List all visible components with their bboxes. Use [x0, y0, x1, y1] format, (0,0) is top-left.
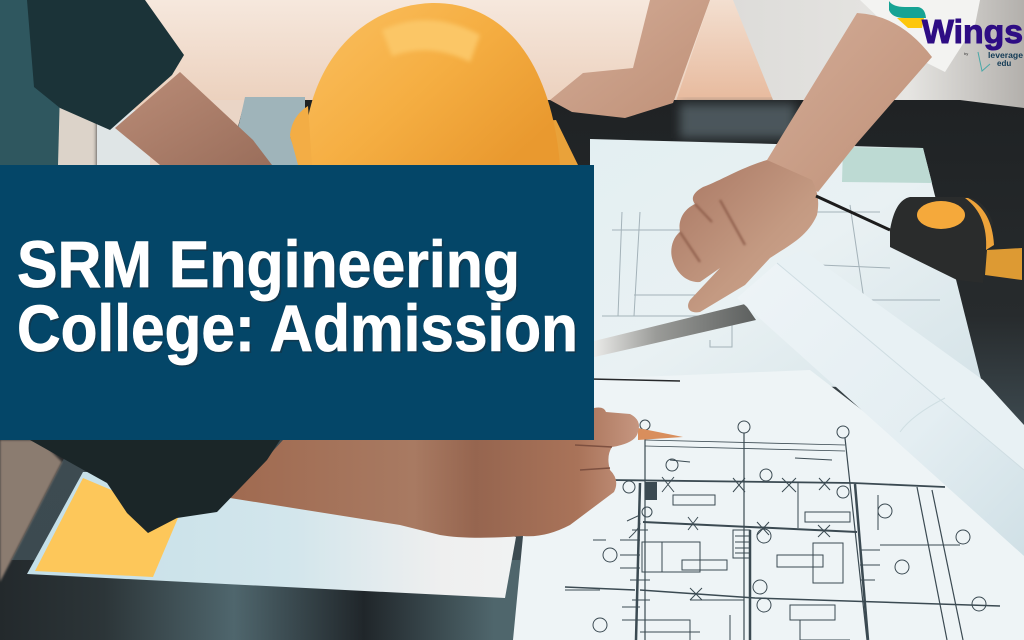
title text	[17, 227, 580, 367]
logo: Wings by leverage edu	[889, 1, 1024, 71]
logo mark	[889, 1, 926, 28]
upper middle person: arm and hand on the table	[550, 0, 710, 118]
title banner	[0, 165, 594, 440]
upper right person: shirt, sleeve and forearm	[733, 0, 1024, 192]
steel ruler	[590, 304, 756, 358]
pencil	[638, 428, 683, 440]
logo: Wings by leverage edu: edu	[997, 59, 1011, 68]
lower-left white sheet with yellow note	[27, 470, 516, 598]
title text: College: Admission	[19, 293, 580, 367]
title text: SRM Engineering	[19, 229, 522, 303]
upper right person: open hand	[671, 160, 818, 312]
title text: College: Admission	[17, 291, 578, 365]
lower person: dark sleeve and arm with hand	[30, 408, 683, 538]
logo: Wings by leverage edu: leverage	[988, 51, 1024, 60]
background: blurred room behind the table	[0, 0, 1024, 170]
upper blueprint sheet	[590, 139, 984, 391]
left person: dark shirt and forearm	[0, 0, 272, 165]
main blueprint sheet	[513, 370, 1024, 640]
hard hat	[290, 3, 578, 165]
front roll	[737, 263, 1024, 556]
yellow sticky note	[35, 478, 178, 577]
rolled blueprints	[737, 250, 1024, 556]
title text: SRM Engineering	[17, 227, 520, 301]
floor plan drawing	[565, 420, 1000, 640]
wordmark: Wings	[922, 13, 1023, 50]
back roll	[777, 250, 1024, 490]
tape measure	[816, 196, 1022, 283]
byline: by	[964, 51, 968, 56]
